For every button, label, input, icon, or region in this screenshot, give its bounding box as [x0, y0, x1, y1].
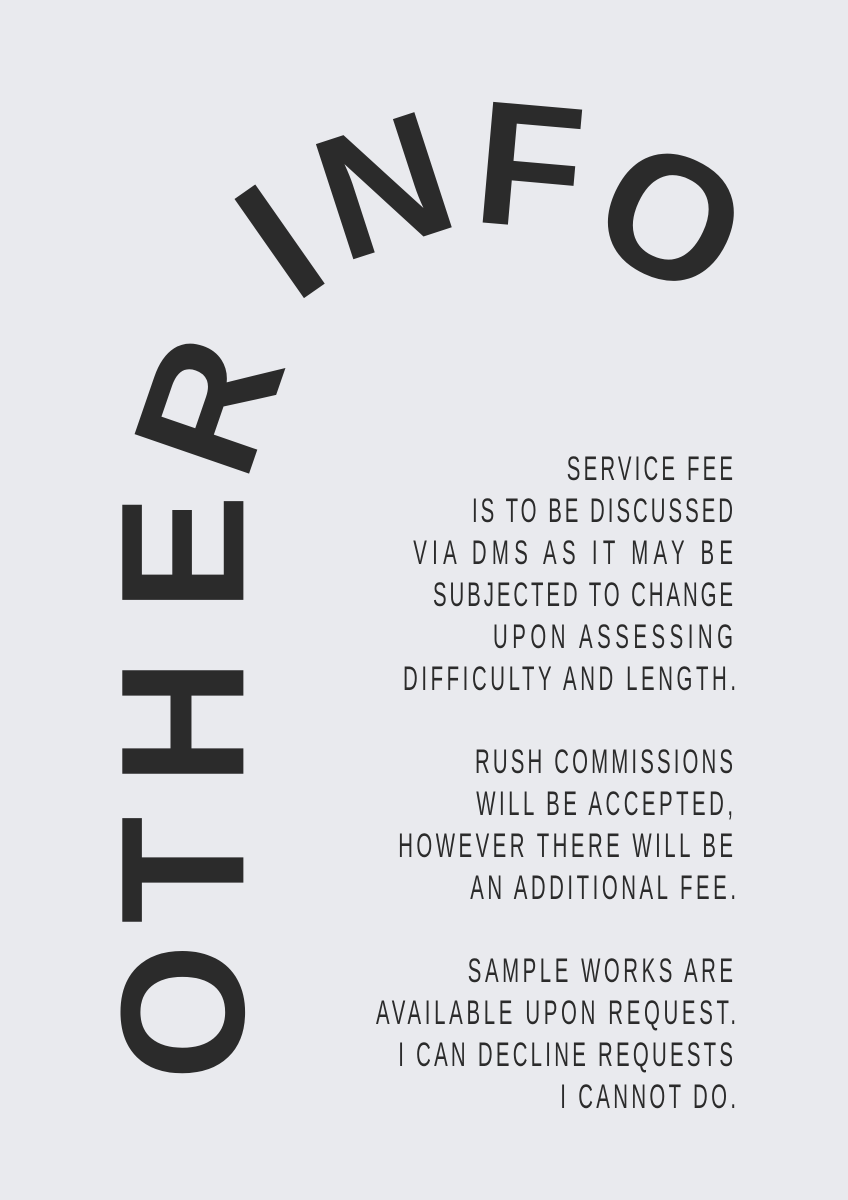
paragraph: rush commissions: HOWEVER THERE WILL BE — [398, 827, 733, 864]
paragraph: service fee: SERVICE FEE — [567, 450, 733, 487]
paragraph: rush commissions: AN ADDITIONAL FEE. — [470, 869, 736, 906]
paragraph: rush commissions: WILL BE ACCEPTED, — [476, 785, 733, 822]
text block: info paragraphs — [376, 450, 736, 1115]
letter F: F — [468, 64, 592, 269]
letter R: R — [96, 313, 323, 497]
title: OTHER INFO arc — [85, 64, 774, 1080]
letter E: E — [85, 494, 281, 612]
paragraph: sample works: I CANNOT DO. — [560, 1078, 736, 1115]
paragraph: service fee: UPON ASSESSING — [493, 618, 733, 655]
paragraph: service fee: SUBJECTED TO CHANGE — [433, 576, 733, 613]
paragraph: service fee — [403, 450, 736, 697]
paragraph: sample works — [376, 952, 736, 1115]
letter T: T — [85, 816, 281, 924]
letter H: H — [85, 658, 281, 786]
letter O (bottom): O — [85, 944, 281, 1080]
letter O (top): O — [567, 100, 774, 336]
paragraph: sample works: AVAILABLE UPON REQUEST. — [376, 994, 736, 1031]
paragraph: service fee: VIA DMS AS IT MAY BE — [413, 534, 733, 571]
paragraph: service fee: IS TO BE DISCUSSED — [472, 492, 733, 529]
paragraph: rush commissions: RUSH COMMISSIONS — [475, 743, 733, 780]
paragraph: service fee: DIFFICULTY AND LENGTH. — [403, 660, 736, 697]
paragraph: sample works: I CAN DECLINE REQUESTS — [398, 1036, 733, 1073]
paragraph: sample works: SAMPLE WORKS ARE — [468, 952, 733, 989]
paragraph: rush commissions — [398, 743, 736, 906]
letter N: N — [293, 73, 475, 299]
letter I: I — [204, 147, 356, 336]
